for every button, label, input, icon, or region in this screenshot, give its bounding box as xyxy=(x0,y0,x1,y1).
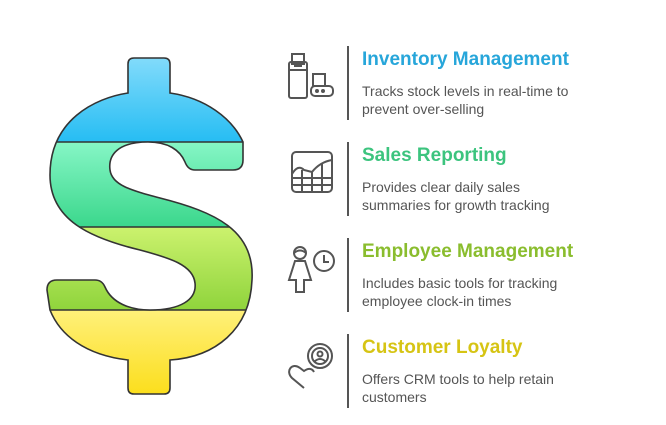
icon: sales chart xyxy=(291,151,333,193)
section: sales xyxy=(347,142,550,216)
section: loyalty: Customer Loyalty xyxy=(362,337,522,358)
icon: employee xyxy=(288,246,335,293)
dollar sign xyxy=(46,57,253,395)
section: loyalty: Offers CRM tools to help retain customers xyxy=(362,371,554,405)
icon: inventory xyxy=(288,53,334,99)
section: inventory: Tracks stock levels in real-time to prevent over-selling xyxy=(362,83,568,117)
section: employee xyxy=(347,238,573,312)
section: loyalty xyxy=(347,334,554,408)
section: sales: Sales Reporting xyxy=(362,145,507,166)
section: inventory: Inventory Management xyxy=(362,49,569,70)
section: employee: Includes basic tools for tracking employee clock-in times xyxy=(362,275,557,309)
icon: loyalty xyxy=(288,343,333,389)
section: inventory xyxy=(347,46,569,120)
section: sales: Provides clear daily sales summaries for growth tracking xyxy=(362,179,550,213)
section: employee: Employee Management xyxy=(362,241,573,262)
